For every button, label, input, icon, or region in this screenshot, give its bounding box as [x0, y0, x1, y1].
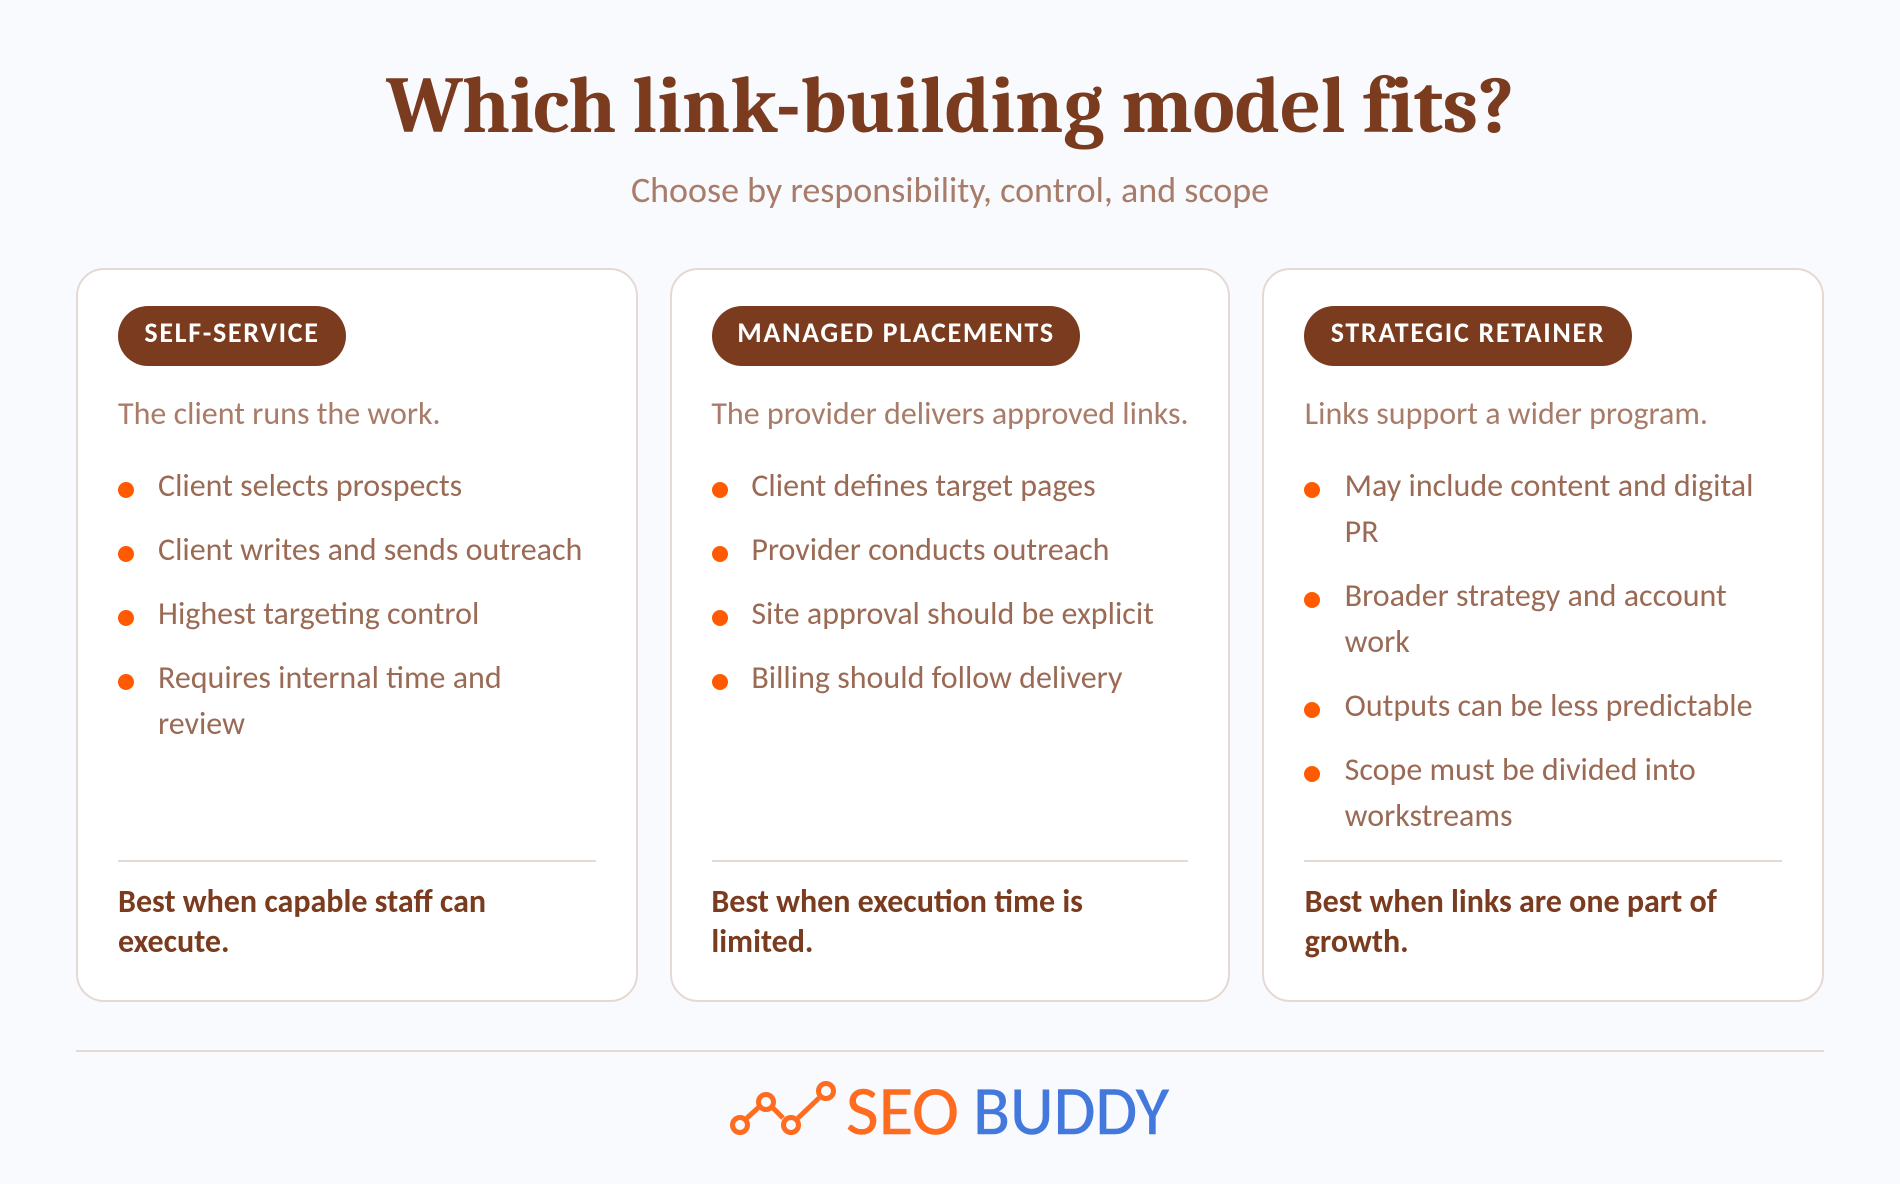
bullet: site approval should be explicit: Site approval should be explicit [751, 594, 1154, 633]
badge: self-service [118, 306, 346, 366]
wordmark [846, 1068, 1169, 1153]
bullet: broader strategy and account work [1304, 576, 1727, 661]
bullet: client selects prospects: Client selects prospects [158, 466, 462, 505]
best-when statement: Best when execution time is [711, 882, 1083, 921]
best-when statement: Best when links are one part of [1305, 882, 1717, 921]
subtitle: Choose by responsibility, control, and scope [631, 168, 1269, 212]
bullet: requires internal time and review: review [158, 704, 245, 743]
panel: strategic retainer [1262, 268, 1824, 1002]
bullet: client defines target pages: Client defines target pages [751, 466, 1096, 505]
badge: strategic retainer: STRATEGIC RETAINER [1331, 315, 1605, 350]
bullet: scope must be divided into workstreams: Scope must be divided into [1345, 750, 1696, 789]
best-when statement: Best when capable staff can [118, 882, 486, 921]
intro text: The client runs the work. [118, 394, 441, 433]
best-when statement: execute. [118, 922, 230, 961]
bullet: client writes and sends outreach: Client writes and sends outreach [158, 530, 582, 569]
bullet: broader strategy and account work: work [1345, 622, 1410, 661]
best-when statement [711, 882, 1083, 961]
badge: self-service: SELF-SERVICE [144, 315, 320, 350]
divider [1304, 860, 1782, 862]
badge: strategic retainer [1304, 306, 1632, 366]
bullet: may include content and digital PR: PR [1345, 512, 1379, 551]
bullet: broader strategy and account work: Broader strategy and account [1345, 576, 1727, 615]
divider [118, 860, 596, 862]
bullet: provider conducts outreach: Provider conducts outreach [751, 530, 1109, 569]
divider [712, 860, 1188, 862]
intro text: Links support a wider program. [1305, 394, 1708, 433]
bullet: requires internal time and review: Requires internal time and [158, 658, 502, 697]
badge: managed placements: MANAGED PLACEMENTS [737, 315, 1055, 350]
bullet: may include content and digital PR: May include content and digital [1345, 466, 1753, 505]
bullet: requires internal time and review [118, 658, 502, 743]
badge: managed placements [712, 306, 1080, 366]
best-when statement: growth. [1305, 922, 1409, 961]
title: Which link-building model fits? [386, 60, 1514, 152]
logo: SEO Buddy [730, 1070, 1170, 1150]
bullet: outputs can be less predictable: Outputs can be less predictable [1345, 686, 1752, 725]
intro text: The provider delivers approved links. [711, 394, 1189, 433]
bullet: scope must be divided into workstreams [1304, 750, 1696, 835]
bullet: may include content and digital PR [1304, 466, 1753, 551]
panel: self-service [76, 268, 638, 1002]
bullet: scope must be divided into workstreams: workstreams [1345, 796, 1512, 835]
best-when statement: limited. [711, 922, 813, 961]
best-when statement [118, 882, 486, 961]
bullet: highest targeting control: Highest targeting control [158, 594, 479, 633]
bullet: billing should follow delivery: Billing should follow delivery [751, 658, 1122, 697]
icon: trend line [732, 1084, 834, 1132]
panel: managed placements [670, 268, 1230, 1002]
best-when statement [1305, 882, 1717, 961]
